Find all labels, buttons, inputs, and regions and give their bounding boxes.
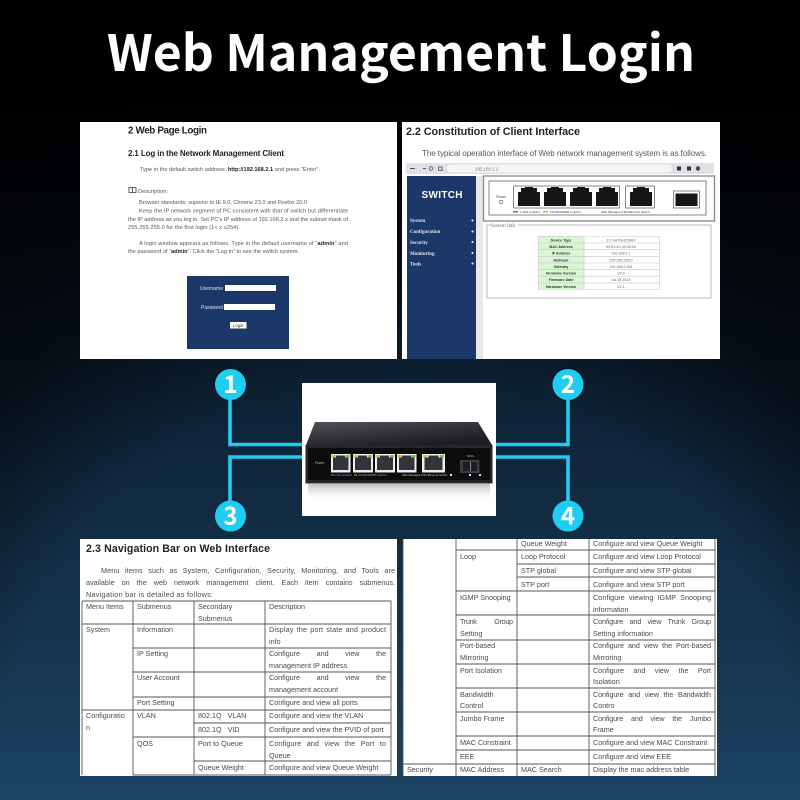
- scrollbar: [476, 176, 483, 359]
- system info panel: 90:E3:4C:00:00:00: [606, 245, 636, 249]
- navigation table part 1: Description: [269, 602, 305, 611]
- navigation table part 1: n: [86, 723, 90, 732]
- badge 4: [552, 496, 584, 532]
- navigation table part 2: information: [593, 605, 629, 614]
- title: Web Management Login: [107, 14, 695, 86]
- intro paragraph: Menu items such as System, Configuration, Security, Monitoring, and Tools are: [101, 566, 395, 575]
- instruction text: Type in the default switch address: http://192.168.2.1 and press "Enter".: [140, 167, 320, 173]
- navigation table part 1: Submenus: [137, 602, 172, 611]
- login window: [187, 276, 289, 349]
- navigation table part 2: Configure viewing IGMP Snooping: [593, 593, 711, 602]
- heading: client interface: 2.2 Constitution of Client Interface: [406, 126, 580, 138]
- browser toolbar: [406, 163, 714, 174]
- heading: web page login: 2 Web Page Login: [128, 126, 207, 136]
- navigation table part 2: Configure and view Trunk Group: [593, 617, 711, 626]
- device port panel: 1.25G Link/Act: [520, 210, 540, 214]
- description text block: Description:: [138, 189, 168, 195]
- navigation table part 2: Configure and view Queue Weight: [593, 539, 702, 548]
- intro paragraph: [86, 566, 395, 599]
- navigation table part 2: Port-based: [460, 641, 495, 650]
- navigation table part 2: Jumbo Frame: [460, 714, 504, 723]
- sfp port: SFP+: [467, 454, 475, 458]
- navigation table part 1: 802.1Q VID: [198, 725, 240, 734]
- sidebar navigation: Security: [410, 241, 428, 246]
- description text block: [128, 189, 348, 255]
- navigation table part 1: Configure and view the: [269, 673, 386, 682]
- navigation table part 2: Configure and view EEE: [593, 752, 671, 761]
- device port panel: Reset: [496, 195, 506, 199]
- ethernet ports: [331, 454, 445, 472]
- system info panel: Hardware Version: [546, 285, 576, 289]
- system info panel: V1.1: [617, 285, 625, 289]
- system info panel: Firmware Date: [549, 278, 573, 282]
- navigation table part 2: Contro: [593, 701, 615, 710]
- system info panel: 192.168.2.1: [612, 252, 630, 256]
- navigation table part 2: Configure and view STP global: [593, 566, 692, 575]
- badge 3: 3: [223, 496, 238, 532]
- sidebar navigation: Tools: [410, 262, 421, 268]
- system info panel: Jul 18 2023: [612, 278, 630, 282]
- intro text: The typical operation interface of Web network management system is as follows.: [422, 149, 707, 158]
- navigation table part 1: VLAN: [137, 711, 156, 720]
- panel: navigation bar document: [80, 539, 397, 776]
- connector lines: [230, 384, 568, 516]
- icon: book: [129, 188, 136, 192]
- badge 2: 2: [561, 365, 575, 400]
- navigation table part 2: Trunk Group: [460, 617, 513, 626]
- status legend: [331, 473, 481, 477]
- navigation table part 2: Security: [407, 765, 433, 774]
- navigation table part 1: [82, 601, 391, 775]
- navigation table part 1: System: [86, 625, 110, 634]
- navigation table part 1: Port to Queue: [198, 739, 243, 748]
- navigation table part 1: Configuratio: [86, 711, 125, 720]
- panel: navigation table continued: [403, 539, 717, 776]
- navigation table part 2: Loop: [460, 552, 476, 561]
- navigation table part 1: Configure and view the: [269, 649, 386, 658]
- panel: web page login document: [80, 122, 397, 359]
- navigation table part 2: Control: [460, 701, 484, 710]
- navigation table part 1: Queue: [269, 751, 291, 760]
- badge 4: 4: [561, 496, 575, 532]
- navigation table part 1: management account: [269, 685, 338, 694]
- status legend: Web Managed 2.5G Ethernet Switch: [402, 473, 448, 477]
- login window: Password: [201, 305, 223, 311]
- description text block: 255.255.255.0 for the first login (1< x ≤254).: [128, 225, 240, 231]
- switch reflection: [308, 484, 490, 501]
- navigation table part 2: STP port: [521, 580, 549, 589]
- sidebar navigation: [407, 176, 476, 359]
- product photo: network switch: [302, 383, 496, 516]
- login window: Username: [200, 286, 223, 292]
- navigation table part 2: Isolation: [593, 677, 620, 686]
- navigation table part 1: User Account: [137, 673, 180, 682]
- switch front face: Power: [315, 461, 325, 465]
- navigation table part 2: Queue Weight: [521, 539, 567, 548]
- navigation table part 1: Queue Weight: [198, 763, 244, 772]
- navigation table part 2: [403, 539, 715, 776]
- system info panel: Device Type: [551, 238, 571, 242]
- sidebar navigation: Configuration: [410, 230, 440, 235]
- navigation table part 2: Configure and view the Port: [593, 666, 711, 675]
- navigation table part 2: Bandwidth: [460, 690, 494, 699]
- navigation table part 1: Secondary: [198, 602, 233, 611]
- navigation table part 1: Configure and view all ports: [269, 698, 358, 707]
- description text block: the password of "admin". Click the "Log in" to see the switch system.: [128, 249, 299, 255]
- navigation table part 2: STP global: [521, 566, 556, 575]
- description text block: A login window appears as follows. Type in the default username of "admin" and: [139, 241, 348, 247]
- status legend: 10/100/1000M Link/Act: [358, 473, 387, 477]
- status legend: 2.5G Link/Act: [335, 473, 352, 477]
- badge 1: [215, 365, 246, 400]
- navigation table part 2: Configure and view the Port-based: [593, 641, 711, 650]
- system info panel: [487, 222, 711, 298]
- navigation table part 2: MAC Search: [521, 765, 562, 774]
- system info panel: IP Address: [552, 252, 570, 256]
- intro paragraph: available on the web network management client. Each item contains submenus.: [86, 578, 395, 587]
- navigation table part 1: Configure and view the Port to: [269, 739, 386, 748]
- navigation table part 1: Submenus: [198, 614, 233, 623]
- intro paragraph: Navigation bar is detailed as follows:: [86, 590, 213, 599]
- navigation table part 2: EEE: [460, 752, 475, 761]
- navigation table part 1: Menu Items: [86, 602, 124, 611]
- navigation table part 2: Port Isolation: [460, 666, 502, 675]
- system info panel: MAC Address: [549, 245, 573, 249]
- navigation table part 1: Display the port state and product: [269, 625, 386, 634]
- switch top face: [306, 422, 492, 445]
- switch front face: [306, 445, 492, 484]
- navigation table part 2: Frame: [593, 725, 614, 734]
- navigation table part 2: Mirroring: [460, 653, 488, 662]
- navigation table part 2: Display the mac address table: [593, 765, 689, 774]
- sidebar navigation: SWITCH: [422, 190, 462, 201]
- navigation table part 2: MAC Constraint: [460, 738, 511, 747]
- navigation table part 1: QOS: [137, 739, 153, 748]
- navigation table part 2: Configure and view the Bandwidth: [593, 690, 711, 699]
- badge 2: [552, 365, 584, 400]
- system info panel: 255.255.255.0: [610, 258, 632, 262]
- device port panel: [484, 176, 714, 221]
- system info panel: V0.9: [617, 272, 625, 276]
- navigation table part 1: Port Setting: [137, 698, 175, 707]
- badge 1: 1: [223, 365, 238, 400]
- navigation table part 2: Setting: [460, 629, 482, 638]
- navigation table part 2: Configure and view MAC Constraint: [593, 738, 707, 747]
- sidebar navigation: System: [410, 219, 426, 224]
- panel: client interface document: [402, 122, 720, 359]
- sfp port: [460, 454, 480, 473]
- badge 3: [215, 496, 246, 532]
- heading: navigation bar: 2.3 Navigation Bar on Web Interface: [86, 543, 270, 555]
- description text block: the IP address as you log in. Set PC's IP address of 192.168.2.x and the subnet mask of: [128, 217, 348, 223]
- navigation table part 1: Configure and view the VLAN: [269, 711, 363, 720]
- system info panel: ZX-SHTGH218AS: [606, 238, 636, 242]
- device port panel: 10/100/1000M Link/Act: [550, 210, 581, 214]
- navigation table part 2: Setting information: [593, 629, 653, 638]
- system info panel: System Info: [491, 224, 516, 229]
- system info panel: Netmask: [554, 258, 568, 262]
- navigation table part 2: MAC Address: [460, 765, 504, 774]
- navigation table part 2: Mirroring: [593, 653, 621, 662]
- system info panel: Gateway: [554, 265, 568, 269]
- navigation table part 1: Configure and view the PVID of port: [269, 725, 384, 734]
- description text block: Keep the IP network segment of PC consistent with that of switch but differentiate: [139, 208, 348, 214]
- system info panel: Firmware Version: [546, 272, 576, 276]
- navigation table part 1: management IP address: [269, 661, 348, 670]
- navigation table part 1: Information: [137, 625, 173, 634]
- system info panel: 192.168.2.254: [610, 265, 632, 269]
- heading: log in: 2.1 Log in the Network Management Client: [128, 149, 284, 158]
- navigation table part 2: Loop Protocol: [521, 552, 566, 561]
- description text block: Browser standards: superior to IE 9.0, Chrome 23.0 and Firefox 20.0: [139, 200, 307, 206]
- navigation table part 2: Configure and view STP port: [593, 580, 685, 589]
- navigation table part 1: IP Setting: [137, 649, 168, 658]
- device port panel: Web Managed 2.5G Ethernet Switch: [601, 210, 650, 214]
- sidebar navigation: Monitoring: [410, 252, 435, 257]
- navigation table part 2: Configure and view the Jumbo: [593, 714, 711, 723]
- login window: Login: [233, 323, 244, 328]
- navigation table part 1: Configure and view Queue Weight: [269, 763, 378, 772]
- navigation table part 2: Configure and view Loop Protocol: [593, 552, 701, 561]
- navigation table part 1: 802.1Q VLAN: [198, 711, 246, 720]
- browser toolbar: 192.168.2.1: [475, 166, 499, 172]
- navigation table part 1: info: [269, 637, 281, 646]
- navigation table part 2: IGMP Snooping: [460, 593, 511, 602]
